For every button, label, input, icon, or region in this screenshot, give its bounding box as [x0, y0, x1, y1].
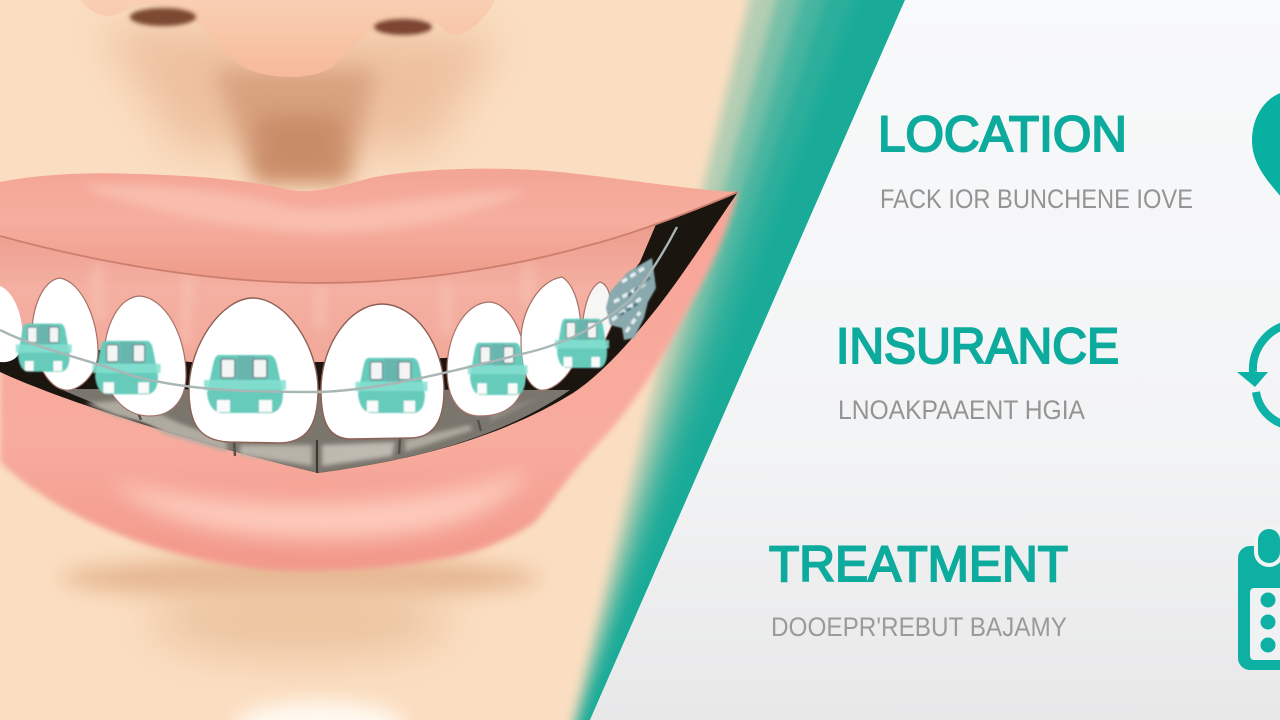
- bracket 6: [555, 319, 609, 368]
- chin highlight: [235, 702, 405, 720]
- braces wire: [0, 227, 677, 392]
- gum vertical shading: [97, 265, 528, 345]
- cheek-side teal fade: [566, 0, 905, 720]
- right nostril: [374, 19, 432, 35]
- upper lip: [0, 169, 738, 283]
- description: treatment: DOOEPR'REBUT BAJAMY: [771, 612, 1067, 642]
- icon: location pin: [1252, 90, 1280, 210]
- section: insurance: [836, 318, 1119, 425]
- bracket 2: [93, 341, 161, 394]
- bracket 3: [204, 355, 286, 413]
- bracket 5: [468, 343, 528, 395]
- lower teeth: [60, 389, 570, 473]
- icon: cycle arrows: [1237, 325, 1280, 425]
- braces brackets: [16, 258, 656, 413]
- icon: calendar: [1238, 527, 1280, 670]
- section: treatment: [769, 536, 1068, 642]
- shadow: philtrum: [215, 70, 375, 182]
- tooth: far left: [0, 286, 23, 362]
- heading: treatment: TREATMENT: [769, 536, 1068, 592]
- upper teeth: [0, 277, 612, 443]
- shadow: under nose: [100, 25, 500, 150]
- bracket 1: [16, 324, 72, 372]
- description: insurance: LNOAKPAAENT HGIA: [838, 395, 1085, 425]
- lower lip: [0, 192, 738, 571]
- section: location: [878, 106, 1193, 214]
- bracket 4: [355, 358, 428, 413]
- panel: face illustration: [0, 0, 905, 720]
- heading: insurance: INSURANCE: [836, 318, 1119, 374]
- bracket cluster: back molars: [606, 258, 656, 340]
- description: location: FACK IOR BUNCHENE IOVE: [880, 184, 1193, 214]
- mouth interior: [0, 192, 738, 473]
- upper gums: [0, 215, 660, 362]
- shadow under lower lip: [60, 558, 540, 598]
- nose: [80, 0, 495, 77]
- panel: right information panel: [590, 0, 1280, 720]
- heading: location: LOCATION: [878, 106, 1127, 162]
- left nostril: [130, 8, 196, 26]
